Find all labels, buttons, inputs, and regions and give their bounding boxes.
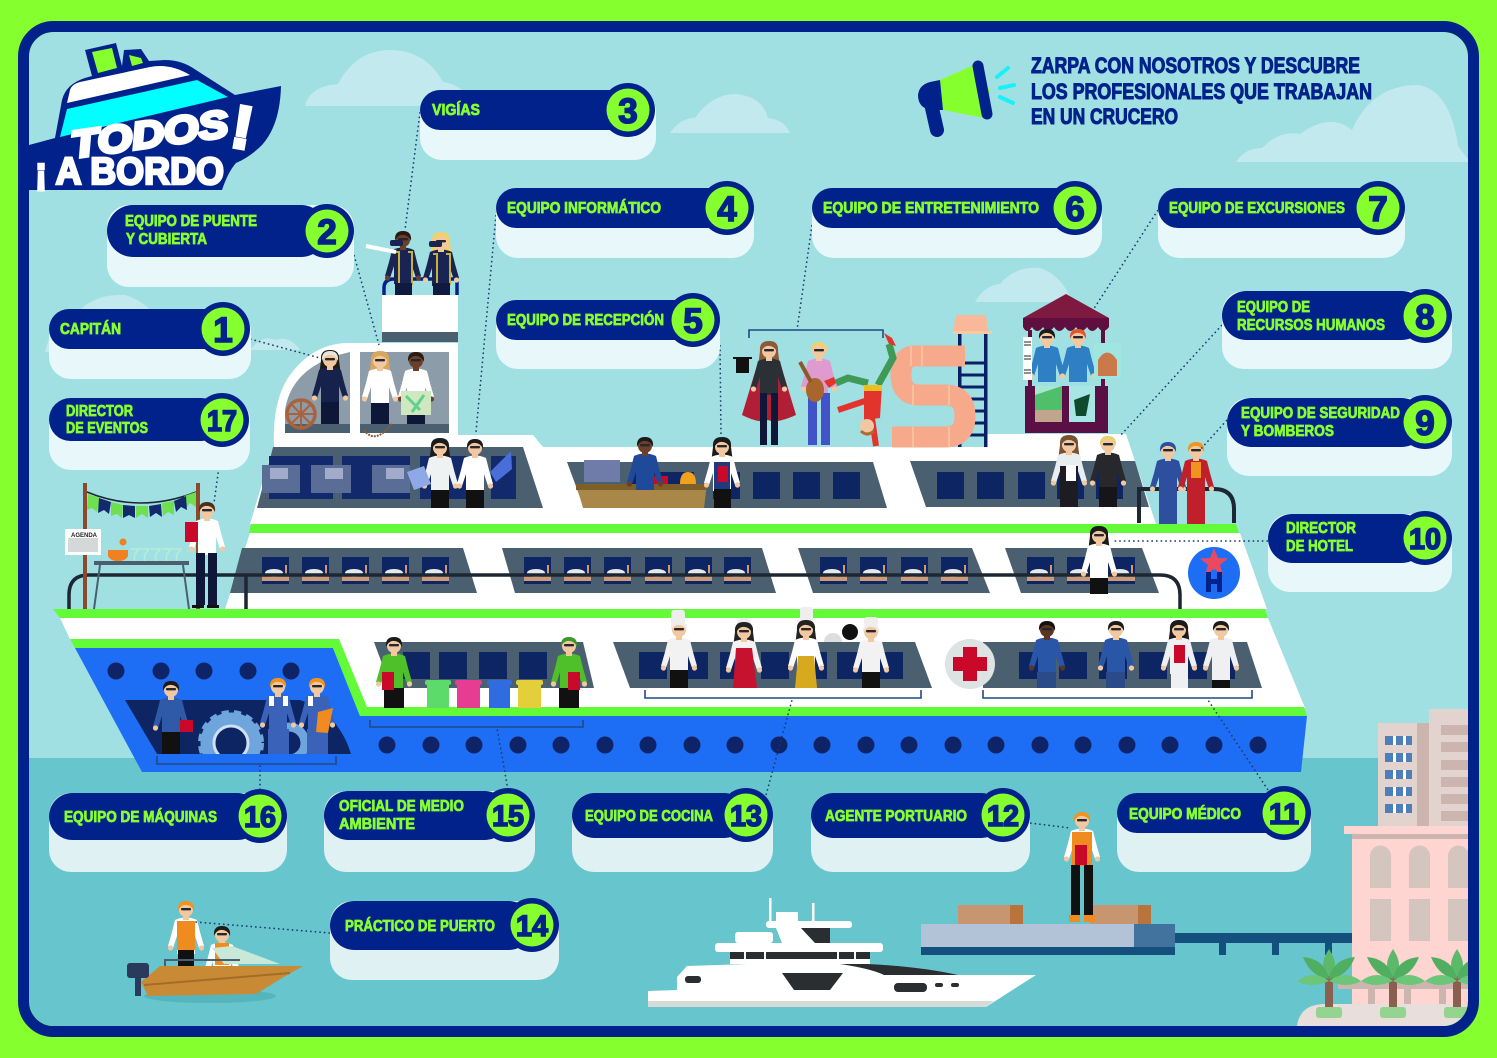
headline: ZARPA CON NOSOTROS Y DESCUBRE [1031,53,1360,78]
label 4: Equipo informático: 4 [717,190,737,229]
label 7: Equipo de excursiones: 7 [1368,190,1388,229]
headline: LOS PROFESIONALES QUE TRABAJAN [1031,79,1372,104]
label 10: Director de hotel: 10 [1409,523,1441,556]
pilot boat [127,901,303,1003]
label 4: Equipo informático: EQUIPO INFORMÁTICO [507,198,661,217]
label 16: Equipo de máquinas: 16 [244,801,276,834]
party area: AGENDA [71,533,98,539]
front portholes [108,662,300,680]
label 8: Equipo de recursos humanos: EQUIPO DE [1237,299,1310,316]
people: kitchen team [661,607,889,688]
label 11: Equipo médico: EQUIPO MÉDICO [1129,804,1241,823]
deck 2 hull [225,533,1267,609]
people: captain [287,350,348,428]
label 3: Vigías [420,83,656,160]
ship [53,231,1307,773]
label 5: Equipo de recepción [496,293,720,369]
main hull white [60,618,1305,708]
label 9: Equipo de seguridad y bomberos [1227,395,1452,476]
people: engine team [153,678,335,754]
lower portholes [378,736,1266,754]
label 17: Director de eventos: DE EVENTOS [66,420,148,437]
people: hotel director [1081,526,1117,594]
label 16: Equipo de máquinas [49,789,287,872]
label 8: Equipo de recursos humanos [1222,289,1452,369]
cabin windows deck 2 [230,548,1159,593]
label 11: Equipo médico: 11 [1269,798,1299,831]
building skyline [1338,709,1469,1006]
people: entertainment [733,341,837,445]
party area [65,483,200,609]
shore with palms [1297,949,1468,1026]
label 9: Equipo de seguridad y bomberos: EQUIPO DE SEGURIDAD [1241,405,1400,422]
bridge superstructure [274,343,543,447]
label 15: Oficial de medio ambiente [324,788,535,872]
logo: ¡Todos a bordo!: ! [227,93,258,162]
label 12: Agente portuario: AGENTE PORTUARIO [825,808,967,825]
connector lines [195,112,1268,933]
label 13: Equipo de cocina: 13 [730,800,762,833]
lookout tower [382,279,458,342]
engine room window [125,700,351,754]
slide and tower [892,315,992,447]
people: HR [1051,435,1126,507]
logo: ¡Todos a bordo!: ¡ A BORDO [35,151,224,193]
label 13: Equipo de cocina: EQUIPO DE COCINA [585,808,713,825]
label 5: Equipo de recepción: 5 [683,302,703,341]
label 10: Director de hotel: DIRECTOR [1286,520,1356,537]
icon: medical cross [945,639,995,689]
label 14: Práctico de puerto: PRÁCTICO DE PUERTO [345,916,495,935]
people: security and firefighter [1150,442,1214,524]
label 1: Capitán [49,302,251,379]
reception desk [576,460,707,508]
logo: ¡Todos a bordo! [29,43,281,193]
label 15: Oficial de medio ambiente: OFICIAL DE MEDIO [339,798,464,815]
label 8: Equipo de recursos humanos: 8 [1415,298,1435,337]
clouds [45,50,1470,352]
label 2: Equipo de puente y cubierta [107,204,354,287]
label 17: Director de eventos [49,393,250,470]
label 11: Equipo médico [1117,786,1311,872]
label 8: Equipo de recursos humanos: RECURSOS HUMANOS [1237,317,1385,334]
headline: EN UN CRUCERO [1031,104,1178,129]
label 14: Práctico de puerto: 14 [516,910,548,943]
deck green stripes [53,524,1268,618]
aft windows deck 3 [910,461,1149,507]
excursion booth [1023,294,1121,433]
reception windows [567,462,887,508]
deck 3 hull [250,434,1156,524]
IT deck windows [257,447,543,508]
label 15: Oficial de medio ambiente: AMBIENTE [339,816,415,833]
yacht [648,898,1036,1007]
label 9: Equipo de seguridad y bomberos: Y BOMBEROS [1241,423,1334,440]
recycling bins [425,680,543,708]
hull green stripe [70,639,1307,716]
lower deck windows [374,642,1262,688]
label 1: Capitán: 1 [213,311,233,350]
label 16: Equipo de máquinas: EQUIPO DE MÁQUINAS [64,807,217,826]
bridge windows [285,352,449,433]
label 12: Agente portuario: 12 [987,800,1019,833]
people: environment officers [376,637,587,708]
label 7: Equipo de excursiones [1158,181,1405,258]
label 6: Equipo de entretenimiento [812,181,1102,258]
label 7: Equipo de excursiones: EQUIPO DE EXCURSIONES [1169,200,1345,217]
people: medical team [1029,620,1239,688]
label 13: Equipo de cocina [572,788,773,872]
people: bridge officers [362,351,434,436]
label 2: Equipo de puente y cubierta: Y CUBIERTA [126,231,207,248]
people: IT team [407,438,512,508]
label 14: Práctico de puerto [330,898,559,980]
label 10: Director de hotel: DE HOTEL [1286,538,1353,555]
people: lookouts [366,231,459,295]
label 9: Equipo de seguridad y bomberos: 9 [1415,404,1435,443]
headline [1031,53,1372,129]
people: reception [627,437,740,508]
label 5: Equipo de recepción: EQUIPO DE RECEPCIÓN [507,310,664,329]
label 6: Equipo de entretenimiento: EQUIPO DE ENTRETENIMIENTO [823,200,1039,217]
upper railing [1139,489,1234,523]
label 2: Equipo de puente y cubierta: 2 [317,213,337,252]
label 6: Equipo de entretenimiento: 6 [1065,190,1085,229]
label 12: Agente portuario [811,788,1030,872]
port agent [1064,812,1100,922]
label 3: Vigías: 3 [618,92,638,131]
icon: megaphone [918,65,1014,130]
label 3: Vigías: VIGÍAS [432,100,480,119]
label 17: Director de eventos: 17 [207,405,237,438]
label 17: Director de eventos: DIRECTOR [66,403,133,420]
label 2: Equipo de puente y cubierta: EQUIPO DE PUENTE [125,213,257,230]
pier [921,905,1352,955]
people: acrobat [824,333,896,446]
label 4: Equipo informático [496,181,754,258]
label 10: Director de hotel [1268,511,1452,592]
section brackets [157,330,1252,764]
railing [69,575,1180,609]
people: event director [185,502,225,608]
icon: hotel badge [1188,547,1240,599]
logo: ¡Todos a bordo!: TODOS [68,103,231,167]
hull blue [75,648,1307,772]
label 1: Capitán: CAPITÁN [60,319,121,338]
label 15: Oficial de medio ambiente: 15 [492,800,524,833]
